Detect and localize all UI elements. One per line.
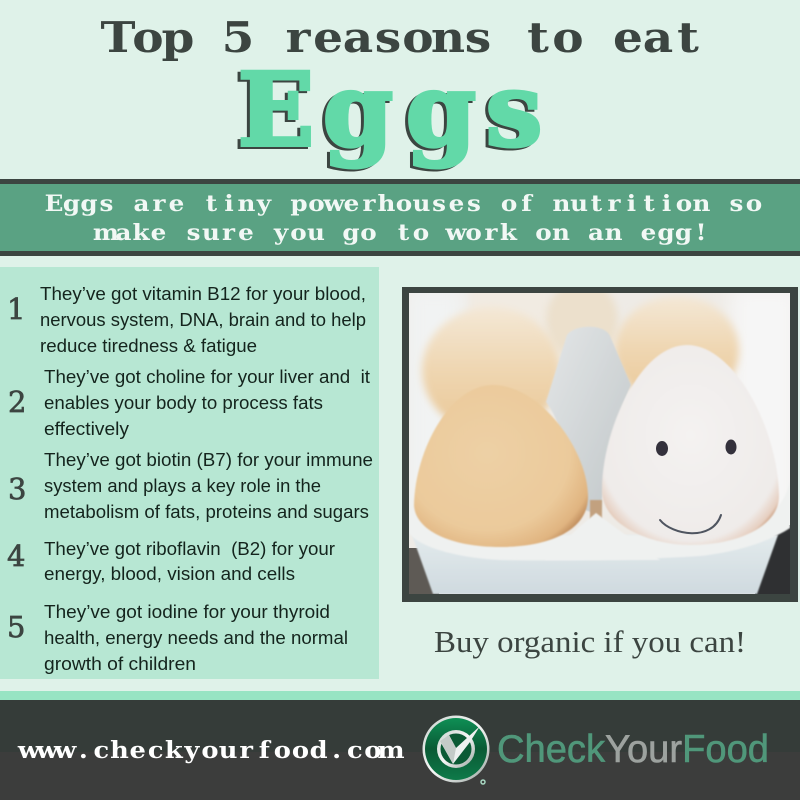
reason 3: They’ve got biotin (B7) for your immune [44, 449, 373, 470]
reason 1: 1 [7, 292, 25, 326]
panel: five reasons [0, 267, 379, 679]
icon: smiley eyes and mouth [656, 440, 736, 533]
reason 5: growth of children [44, 653, 196, 674]
heading: Eggs: Eggs [235, 53, 539, 171]
reason 5: health, energy needs and the normal [44, 627, 348, 648]
reason 5: They’ve got iodine for your thyroid [44, 601, 330, 622]
banner: intro message: Eggs are tiny powerhouses of nutrition so [45, 190, 762, 217]
reason 2 [8, 366, 370, 439]
caption: Buy organic if you can!: Buy organic if you can! [434, 624, 746, 659]
reason 4: 4 [7, 539, 25, 573]
banner: intro message: make sure you go to work on an egg! [93, 219, 706, 246]
reason 3: 3 [8, 472, 26, 506]
reason 4: energy, blood, vision and cells [44, 563, 295, 584]
title: Top 5 reasons to eat: Top 5 reasons to eat [101, 12, 699, 62]
reason 4: They’ve got riboflavin (B2) for your [44, 538, 335, 559]
reason 1: nervous system, DNA, brain and to help [40, 309, 366, 330]
logo wordmark: CheckYourFood: CheckYourFood [497, 728, 769, 771]
reason 3 [8, 449, 373, 522]
reason 5: 5 [7, 610, 25, 644]
photo: eggs in a carton with a smiley face [402, 280, 800, 602]
reason 3: metabolism of fats, proteins and sugars [44, 501, 369, 522]
reason 2: effectively [44, 418, 130, 439]
reason 1: They’ve got vitamin B12 for your blood, [40, 283, 366, 304]
icon: CheckYourFood logo badge [422, 716, 490, 784]
banner: intro message [0, 179, 800, 256]
reason 5 [7, 601, 348, 674]
reason 1: reduce tiredness & fatigue [40, 335, 257, 356]
reason 1 [7, 283, 366, 356]
reason 2: 2 [8, 385, 26, 419]
website address: www.checkyourfood.com [17, 736, 405, 764]
reason 2: enables your body to process fats [44, 392, 323, 413]
footer bar [0, 691, 800, 800]
reason 4 [7, 538, 335, 584]
reason 2: They’ve got choline for your liver and it [44, 366, 370, 387]
heading: Eggs: Eggs [238, 51, 542, 169]
reason 3: system and plays a key role in the [44, 475, 321, 496]
